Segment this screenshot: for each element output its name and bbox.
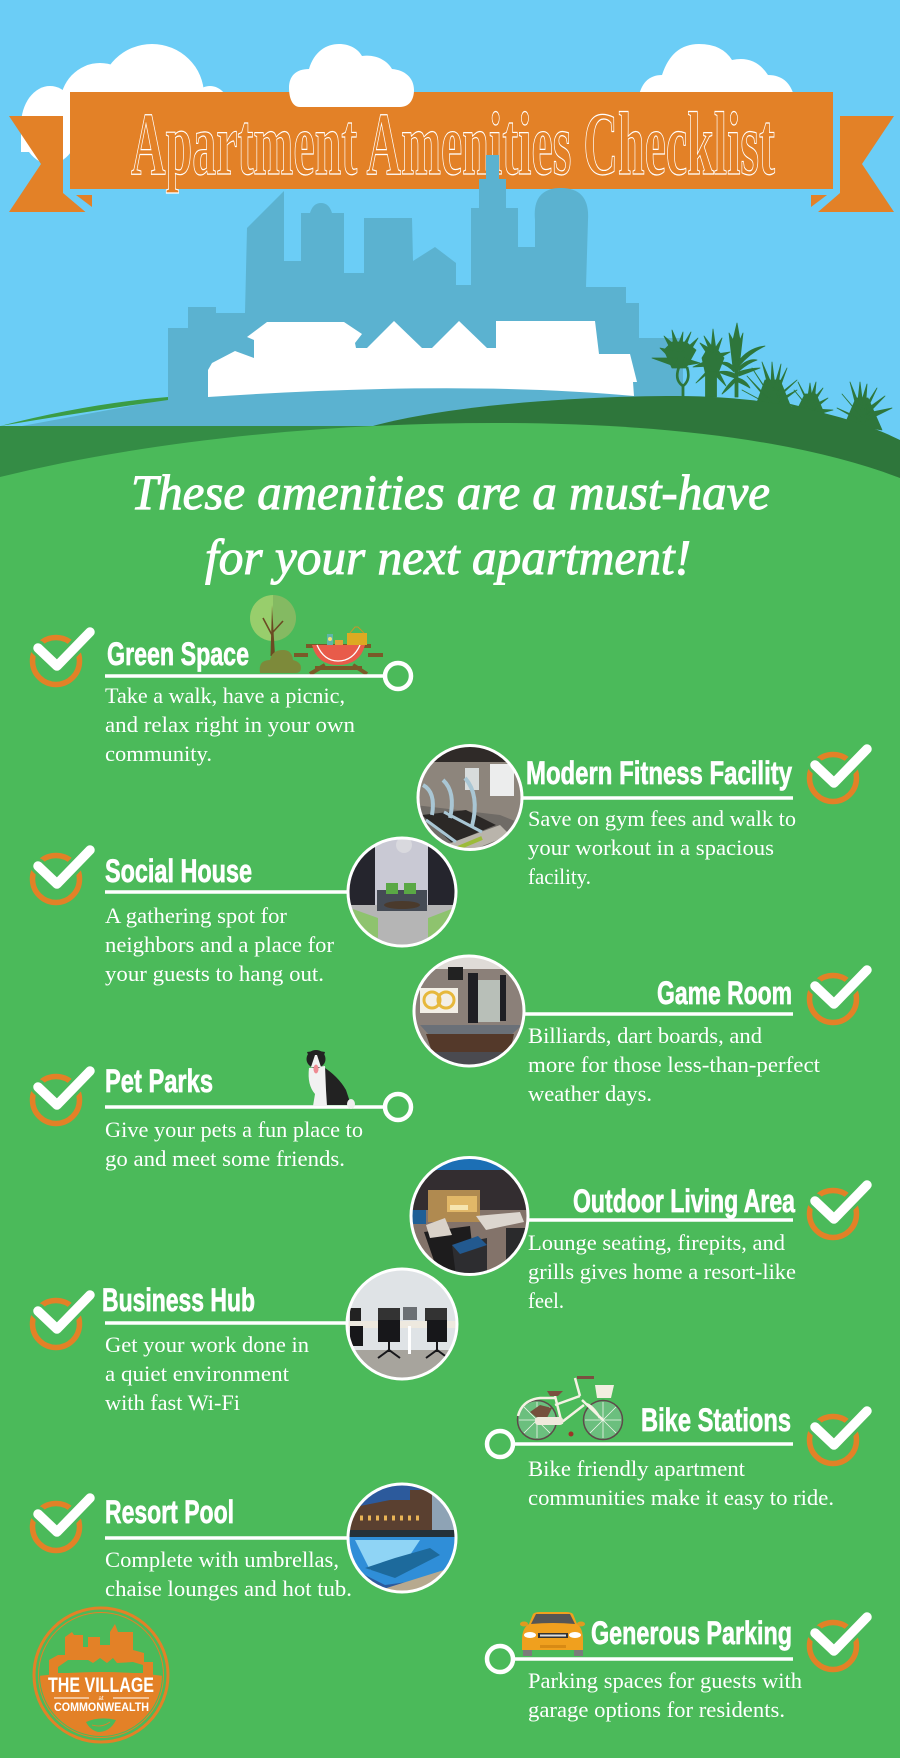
plants — [652, 323, 892, 430]
panel: game room — [410, 955, 867, 1106]
text: A gathering spot for — [105, 903, 288, 928]
panel: bike stations — [487, 1376, 867, 1510]
icon: tree — [250, 595, 301, 673]
check icon — [32, 632, 90, 684]
heading: Game Room — [657, 975, 792, 1011]
connector — [487, 1431, 793, 1457]
heading: Bike Stations — [641, 1402, 791, 1438]
text: and relax right in your own — [105, 712, 355, 737]
icon: bicycle — [518, 1376, 622, 1440]
text: Parking spaces for guests with — [528, 1668, 802, 1693]
logo lower fill — [40, 1672, 162, 1736]
text: garage options for residents. — [528, 1697, 785, 1722]
logo small text: COMMONWEALTH — [54, 1702, 149, 1714]
text: Complete with umbrellas, — [105, 1547, 339, 1572]
title banner — [9, 92, 894, 212]
text — [105, 1332, 309, 1415]
logo small text — [54, 1696, 149, 1714]
icon: dog — [306, 1050, 355, 1109]
ribbon left — [9, 116, 92, 212]
cloud right — [638, 44, 795, 100]
subtitle: for your next apartment! — [205, 529, 691, 585]
cloud left — [21, 44, 230, 164]
photo: business centre — [345, 1267, 460, 1383]
text: Billiards, dart boards, and — [528, 1023, 762, 1048]
subtitle: These amenities are a must-have — [131, 464, 770, 520]
panel: business hub — [32, 1267, 460, 1415]
panel: social house — [32, 835, 460, 986]
ribbon right — [811, 116, 894, 212]
panel: resort pool — [32, 1482, 460, 1601]
connector — [105, 890, 349, 894]
text — [528, 1230, 796, 1313]
connector — [520, 796, 793, 800]
text: with fast Wi-Fi — [105, 1390, 240, 1415]
panel: pet parks — [32, 1050, 411, 1171]
logo skyline — [49, 1624, 153, 1676]
text: Save on gym fees and walk to — [528, 806, 796, 831]
left dark hill — [0, 426, 500, 486]
text: chaise lounges and hot tub. — [105, 1576, 352, 1601]
city skyline — [0, 155, 683, 430]
heading: Generous Parking — [591, 1615, 792, 1651]
text: communities make it easy to ride. — [528, 1485, 834, 1510]
text: Lounge seating, firepits, and — [528, 1230, 785, 1255]
connector — [105, 663, 411, 689]
text — [528, 1023, 820, 1106]
text: weather days. — [528, 1081, 652, 1106]
right dark hill — [373, 396, 900, 500]
white houses — [208, 321, 637, 397]
check icon — [32, 1071, 90, 1124]
check icon — [810, 1617, 867, 1670]
text — [528, 806, 796, 889]
check icon — [810, 970, 867, 1022]
photo: gym — [415, 745, 525, 851]
heading: Resort Pool — [105, 1494, 234, 1530]
subtitle — [131, 464, 770, 585]
logo small text: at — [98, 1696, 104, 1702]
text: Get your work done in — [105, 1332, 309, 1357]
check icon — [810, 1411, 867, 1464]
text: feel. — [528, 1288, 564, 1313]
logo rings — [34, 1608, 168, 1742]
green foreground hill — [0, 423, 900, 1758]
panel: green space — [32, 595, 411, 766]
text: Take a walk, have a picnic, — [105, 683, 345, 708]
text: go and meet some friends. — [105, 1146, 345, 1171]
text: grills gives home a resort-like — [528, 1259, 796, 1284]
check icon — [810, 749, 867, 802]
logo leaf — [86, 1718, 116, 1732]
check icon — [32, 1295, 90, 1348]
photo: outdoor lounge — [408, 1155, 532, 1279]
text — [105, 903, 335, 986]
text — [105, 683, 355, 766]
text: your workout in a spacious — [528, 835, 774, 860]
heading: Outdoor Living Area — [573, 1183, 795, 1219]
check icon — [810, 1185, 867, 1238]
panel: modern fitness facility — [415, 745, 867, 889]
logo skyline cutout — [58, 1658, 143, 1673]
cloud centre — [289, 44, 414, 107]
photo: pool — [345, 1482, 460, 1597]
connector — [105, 1094, 411, 1120]
icon: picnic table — [294, 627, 383, 674]
photo: lounge — [345, 835, 460, 950]
check icon — [32, 1498, 90, 1550]
heading: Pet Parks — [105, 1063, 213, 1099]
icon: car — [520, 1612, 585, 1656]
text — [528, 1668, 802, 1722]
heading: Modern Fitness Facility — [526, 755, 792, 791]
text: Bike friendly apartment — [528, 1456, 745, 1481]
text — [528, 1456, 834, 1510]
text: your guests to hang out. — [105, 961, 324, 986]
text — [105, 1117, 363, 1171]
panel: generous parking — [487, 1612, 867, 1722]
text: community. — [105, 741, 212, 766]
logo name: THE VILLAGE — [48, 1674, 154, 1697]
heading: Social House — [105, 853, 252, 889]
banner band — [70, 92, 833, 189]
check icon — [32, 850, 90, 902]
text — [105, 1547, 352, 1601]
connector — [487, 1646, 793, 1672]
text: more for those less-than-perfect — [528, 1052, 820, 1077]
text: Give your pets a fun place to — [105, 1117, 363, 1142]
text: a quiet environment — [105, 1361, 289, 1386]
heading: Business Hub — [102, 1282, 255, 1318]
heading: Green Space — [107, 636, 249, 672]
hill sliver — [0, 397, 168, 426]
connector — [105, 1321, 347, 1325]
panel: outdoor living area — [408, 1155, 867, 1313]
text: facility. — [528, 864, 591, 889]
connector — [105, 1536, 348, 1540]
connector — [523, 1012, 793, 1016]
connector — [527, 1218, 793, 1222]
text: neighbors and a place for — [105, 932, 335, 957]
logo: the village at commonwealth — [30, 1608, 172, 1745]
photo: game room — [410, 955, 530, 1070]
